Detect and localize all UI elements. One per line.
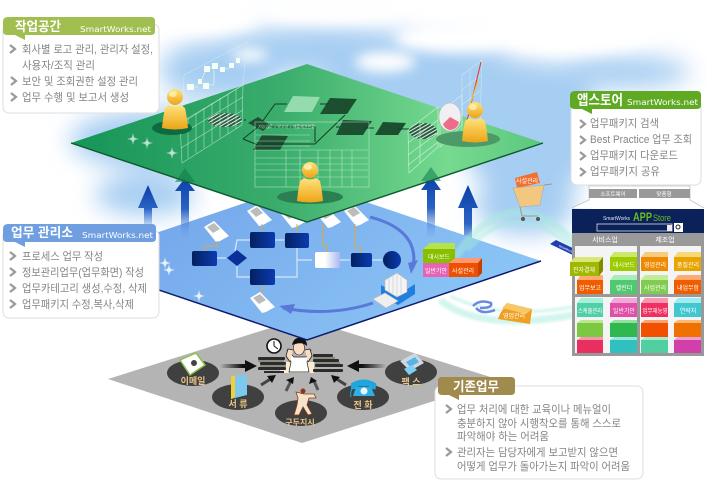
flowchart connectors xyxy=(204,224,361,293)
work management list: 업무카테고리 생성,수정, 삭제 xyxy=(22,282,147,295)
existing work list: 어떻게 업무가 돌아가는지 파악이 어려움 xyxy=(457,460,630,473)
workspace list: 회사별 로고 관리, 관리자 설정, xyxy=(22,43,153,56)
app store list: 업무패키지 다운로드 xyxy=(590,149,678,162)
form overlay xyxy=(255,122,369,187)
fax item: 팩 스 xyxy=(401,376,421,387)
app store window xyxy=(572,186,704,356)
store header xyxy=(572,209,704,233)
green plate flowchart xyxy=(208,96,437,150)
workspace list: 업무 수행 및 보고서 생성 xyxy=(22,91,129,104)
green plate: workspace xyxy=(71,42,543,222)
store tabs: 소프트웨어 xyxy=(600,190,626,198)
person center xyxy=(277,162,343,204)
documents xyxy=(204,205,369,313)
right hologram panels xyxy=(408,60,482,173)
mini cube stack on blue plate xyxy=(423,243,482,277)
icon: blue e xyxy=(473,302,495,312)
arrow shadows seen through plate xyxy=(175,167,441,182)
store header: APP xyxy=(633,210,652,224)
clock xyxy=(267,339,281,353)
sparkles xyxy=(159,257,205,302)
store tabs: 맞춤형 xyxy=(656,190,672,198)
heading: work management xyxy=(3,224,156,247)
workspace list: 보안 및 조회권한 설정 관리 xyxy=(22,75,138,88)
arrows rising behind plates xyxy=(138,185,478,262)
store cubes: 캘린더 xyxy=(616,284,632,292)
work management list: 프로세스 업무 작성 xyxy=(22,250,103,263)
workspace list xyxy=(10,43,153,104)
arrows toward stressed worker xyxy=(220,360,386,391)
heading: workspace: SmartWorks.net xyxy=(80,25,151,34)
app store list: Best Practice 업무 조회 xyxy=(590,133,692,146)
heading: app store: 앱스토어 xyxy=(577,92,623,108)
app store window: 서비스업 xyxy=(592,235,618,244)
existing work list: 업무 처리에 대한 교육이나 메뉴얼이 xyxy=(457,402,611,416)
email item xyxy=(167,353,219,386)
fax item xyxy=(385,353,437,387)
app store list: 업무패키지 공유 xyxy=(590,165,660,178)
heading: app store xyxy=(570,91,701,114)
store cubes: 업무보고 xyxy=(579,284,602,292)
store tabs xyxy=(572,186,704,208)
heading: workspace: 작업공간 xyxy=(15,19,61,34)
store cubes: 사업관리 xyxy=(644,284,666,292)
store cubes: 업무재능영 xyxy=(642,307,668,315)
verbal instruction item: 구두지시 xyxy=(285,418,315,427)
store cubes: 일반기안 xyxy=(613,307,636,315)
icon: shopping cart xyxy=(513,172,552,221)
store header: Store xyxy=(653,213,671,223)
person right xyxy=(436,102,500,147)
teal swooshes xyxy=(440,212,575,321)
heading: existing work: 기존업무 xyxy=(453,379,499,394)
panel: app store xyxy=(570,91,701,185)
store cubes xyxy=(577,252,701,353)
orange cube: sales xyxy=(498,303,532,324)
panel: workspace xyxy=(3,17,159,113)
arrows over blue plate xyxy=(175,176,441,240)
document item: 서 류 xyxy=(228,398,248,409)
icon: blue card: SmartWorks xyxy=(558,244,575,255)
cube: electronic approval xyxy=(570,257,603,276)
app store list: 업무패키지 검색 xyxy=(590,117,659,130)
cycle arcs xyxy=(283,217,414,312)
person left xyxy=(152,89,192,135)
store cubes: 대시보드 xyxy=(613,261,636,269)
icon: pie chart xyxy=(439,103,461,131)
mini cube stack on blue plate: 사설관리 xyxy=(452,267,474,275)
existing work list: 충분하지 않아 시행착오를 통해 스스로 xyxy=(457,416,621,430)
heading: work management: SmartWorks.net xyxy=(82,231,153,240)
stressed worker at desk xyxy=(258,338,343,373)
blue plate: work management xyxy=(73,182,541,340)
store cubes: 품질관리 xyxy=(677,261,699,269)
icon: blue card xyxy=(550,240,585,258)
app store list xyxy=(580,117,692,178)
heading: workspace xyxy=(3,17,155,40)
left hologram panels xyxy=(180,42,247,163)
telephone item xyxy=(337,380,389,410)
store cubes: 스케줄관리 xyxy=(578,307,602,315)
store cubes: 내업무함 xyxy=(677,284,700,292)
form overlay: 기능업무 > 보고서 > 매출채권현황 xyxy=(258,123,315,129)
existing work list: 관리자는 담당자에게 보고받지 않으면 xyxy=(457,446,618,459)
store cubes: 영업관리 xyxy=(644,261,666,269)
icon: shopping cart: 사설관리 xyxy=(516,177,538,185)
heading: work management: 업무 관리소 xyxy=(11,225,73,240)
store cubes: 연락처 xyxy=(680,307,696,315)
panel: existing work xyxy=(435,377,643,479)
telephone item: 전 화 xyxy=(353,399,373,410)
email item: 이메일 xyxy=(181,375,205,386)
process flowchart xyxy=(192,232,401,285)
store header: SmartWorks xyxy=(603,216,630,222)
work management list: 정보관리업무(업무화면) 작성 xyxy=(22,266,144,279)
panel: work management xyxy=(3,224,159,318)
work management list: 업무패키지 수정,복사,삭제 xyxy=(22,298,134,311)
app store window: 제조업 xyxy=(655,236,675,244)
gray plate: existing work xyxy=(108,318,500,443)
existing work list: 파악해야 하는 어려움 xyxy=(457,429,549,443)
existing work list xyxy=(446,402,630,473)
work management list xyxy=(10,250,147,311)
file box icon xyxy=(373,273,415,308)
mini cube stack on blue plate: 대시보드 xyxy=(428,253,451,261)
workspace list: 사용자/조직 관리 xyxy=(22,59,95,72)
heading: existing work xyxy=(438,377,515,400)
orange cube: sales: 영업관리 xyxy=(503,312,525,320)
green sparkles xyxy=(127,133,178,159)
document item xyxy=(212,374,264,410)
heading: app store: SmartWorks.net xyxy=(627,98,698,107)
cube: electronic approval: 전자결재 xyxy=(573,266,595,274)
mini cube stack on blue plate: 일반기안 xyxy=(425,267,448,275)
verbal instruction item xyxy=(275,388,327,427)
